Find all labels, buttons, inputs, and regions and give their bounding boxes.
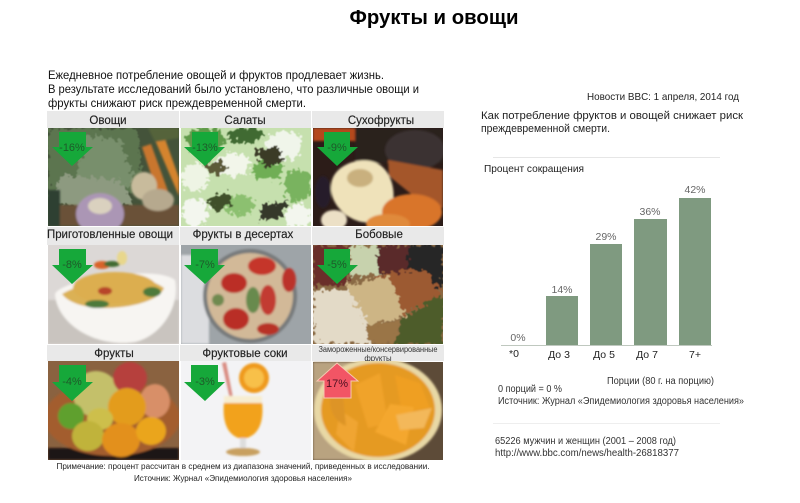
right heading: Как потребление фруктов и овощей снижает риск [481, 110, 743, 122]
chart notes: 0 порций = 0 % [498, 384, 562, 395]
sample and link: http://www.bbc.com/news/health-26818377 [495, 448, 679, 459]
tile: fruit juices: Фруктовые соки [202, 348, 288, 360]
axis labels [509, 348, 701, 361]
axis labels: *0 [509, 348, 519, 360]
arrow: -8%: -8% [62, 259, 82, 271]
tile: salads: Салаты [224, 115, 266, 127]
sample and link: 65226 мужчин и женщин (2001 – 2008 год) [495, 436, 676, 447]
chart: reduction percent by portions [484, 163, 712, 361]
tile: fruit juices [181, 348, 311, 460]
tile: fruit in desserts: Фрукты в десертах [193, 229, 294, 241]
right heading [481, 110, 743, 135]
axis labels: 7+ [689, 349, 701, 361]
axis labels: До 5 [593, 349, 615, 361]
arrow: -13%: -13% [192, 142, 218, 154]
chart notes: Источник: Журнал «Эпидемиология здоровья населения» [498, 396, 744, 407]
label backgrounds [47, 111, 444, 361]
value labels [510, 184, 706, 344]
sample and link [495, 436, 679, 459]
tile: fruit [44, 348, 180, 460]
arrow: -4%: -4% [62, 376, 82, 388]
arrow: -3%: -3% [195, 376, 215, 388]
footnote [56, 461, 430, 483]
arrow: -9%: -9% [327, 142, 347, 154]
value labels: 42% [684, 184, 706, 196]
intro text: В результате исследований было установлено, что различные овощи и [48, 82, 419, 96]
axis labels: До 7 [636, 349, 658, 361]
tile: dried fruit [313, 115, 445, 234]
arrow: -16%: -16% [59, 142, 85, 154]
intro text: фрукты снижают риск преждевременной смерти. [48, 96, 306, 110]
tile: legumes: Бобовые [355, 229, 403, 241]
tile: vegetables [48, 115, 179, 235]
right heading: преждевременной смерти. [481, 123, 610, 135]
tile: fruit: Фрукты [94, 348, 134, 360]
value labels: 14% [551, 284, 573, 296]
tile: fruit in desserts [181, 229, 311, 344]
tile: dried fruit: Сухофрукты [348, 115, 414, 127]
value labels: 0% [510, 332, 526, 344]
value labels: 36% [639, 206, 661, 218]
axis caption: Порции (80 г. на порцию) [607, 376, 714, 387]
tile: frozen and canned fruit: Замороженные/консервированные [318, 345, 438, 354]
panel: food grid [44, 111, 445, 462]
chart title: Процент сокращения [484, 163, 584, 175]
tile: vegetables: Овощи [89, 115, 127, 127]
tile: cooked vegetables [47, 229, 179, 344]
chart notes [498, 384, 744, 407]
tile: legumes [313, 229, 443, 344]
arrow: -7%: -7% [195, 259, 215, 271]
tile: frozen and canned fruit: фрукты [364, 354, 392, 363]
arrow: -5%: -5% [327, 259, 347, 271]
footnote: Источник: Журнал «Эпидемиология здоровья населения» [134, 473, 352, 483]
tile: frozen and canned fruit [313, 345, 443, 462]
intro text: Ежедневное потребление овощей и фруктов продлевает жизнь. [48, 68, 384, 82]
news date: Новости BBC: 1 апреля, 2014 год [587, 91, 739, 103]
footnote: Примечание: процент рассчитан в среднем из диапазона значений, приведенных в исследовании. [56, 461, 430, 471]
arrow: 17%: 17% [326, 378, 348, 390]
axis labels: До 3 [548, 349, 570, 361]
tile: cooked vegetables: Приготовленные овощи [47, 229, 173, 241]
title: Фрукты и овощи [350, 7, 518, 29]
intro text [48, 68, 419, 110]
tile: salads [181, 115, 312, 228]
value labels: 29% [595, 231, 617, 243]
bars [546, 198, 711, 345]
